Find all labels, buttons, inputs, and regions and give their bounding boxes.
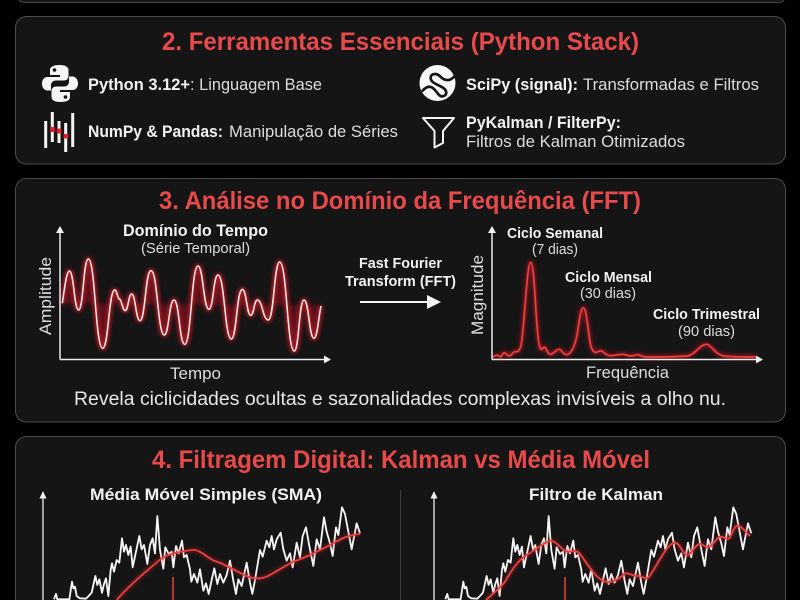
chart title: Filtro de Kalman	[529, 486, 663, 504]
peak label: mensal	[565, 270, 652, 302]
text: scipy	[466, 76, 759, 94]
curve glow	[62, 259, 321, 351]
spectrum	[493, 262, 757, 358]
text: python	[88, 76, 322, 94]
divider	[400, 490, 402, 600]
text: python: : Linguagem Base	[190, 76, 322, 94]
text: python: Python 3.12+	[88, 76, 190, 94]
smoothed line	[117, 534, 360, 600]
icon: python	[42, 65, 78, 102]
marker line	[564, 577, 566, 600]
panel: 2. ferramentas essenciais	[16, 16, 786, 164]
chart: SMA	[40, 486, 360, 600]
noisy series	[54, 507, 360, 599]
icon: funnel	[423, 118, 454, 148]
axes	[60, 231, 326, 360]
chart area glow	[62, 259, 321, 351]
y axis	[42, 495, 44, 600]
arrow: fft transform	[345, 256, 456, 309]
y label: Magnitude	[468, 255, 487, 335]
chart: frequency domain	[468, 226, 763, 382]
heading: filtragem: 4. Filtragem Digital: Kalman vs Média Móvel	[152, 446, 650, 474]
chart title: Média Móvel Simples (SMA)	[90, 486, 322, 504]
chart: kalman	[430, 486, 751, 600]
caption: Revela ciclicidades ocultas e sazonalidades complexas invisíveis a olho nu.	[74, 389, 726, 410]
kalman line	[486, 526, 750, 600]
y axis	[433, 495, 435, 600]
curve	[62, 259, 321, 351]
panel: 3. analise frequencia	[16, 178, 786, 422]
peak label: trimestral	[653, 307, 760, 340]
text: numpy: Manipulação de Séries	[229, 123, 398, 141]
heading: fft: 3. Análise no Domínio da Frequência (FFT)	[159, 187, 641, 215]
heading: ferramentas: 2. Ferramentas Essenciais (Python Stack)	[162, 28, 639, 56]
icon: numpy bars	[44, 112, 74, 152]
peak label: semanal	[507, 226, 603, 258]
peak label: mensal: (30 dias)	[580, 286, 636, 302]
text: numpy: NumPy & Pandas:	[88, 123, 223, 141]
text: scipy: SciPy (signal):	[466, 76, 578, 94]
noisy series	[445, 507, 751, 599]
text: scipy: Transformadas e Filtros	[583, 76, 759, 94]
peak label: semanal: (7 dias)	[532, 242, 578, 258]
axes	[492, 231, 758, 360]
smoothed line glow	[117, 534, 360, 600]
y label: Amplitude	[36, 257, 55, 335]
x label: Tempo	[170, 364, 221, 383]
arrow: fft transform: Transform (FFT)	[345, 274, 456, 290]
chart title: Domínio do Tempo	[123, 222, 268, 240]
panel: previous section remnant	[19, 0, 784, 2]
text: numpy	[88, 123, 398, 141]
peak label: trimestral: Ciclo Trimestral	[653, 307, 760, 323]
text: pykalman	[466, 114, 685, 151]
peak label: semanal: Ciclo Semanal	[507, 226, 603, 242]
arrow: fft transform: Fast Fourier	[359, 256, 442, 272]
marker line	[172, 577, 174, 600]
panel: 4. filtragem digital	[16, 436, 786, 600]
text: pykalman: Filtros de Kalman Otimizados	[466, 133, 685, 151]
peak label: trimestral: (90 dias)	[678, 324, 735, 340]
spectrum glow	[493, 262, 757, 358]
text: pykalman: PyKalman / FilterPy:	[466, 114, 621, 132]
chart: time domain	[36, 222, 331, 383]
peak label: mensal: Ciclo Mensal	[565, 270, 652, 286]
chart subtitle: (Série Temporal)	[141, 241, 250, 257]
x label: Frequência	[586, 363, 670, 382]
icon: scipy	[420, 65, 456, 101]
kalman line glow	[486, 526, 750, 600]
